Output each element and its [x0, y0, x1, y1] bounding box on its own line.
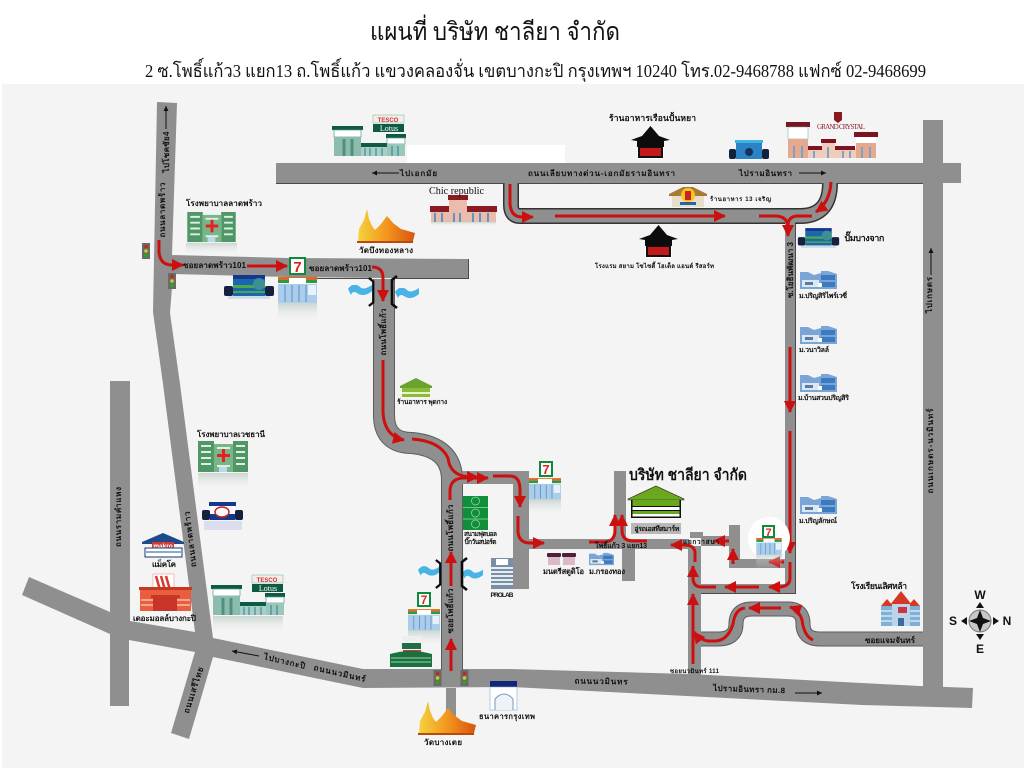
road labels: ถนนโพธิ์แก้ว — [444, 504, 455, 552]
place labels: ม.บ้านสวนปริญสิริ — [798, 393, 849, 402]
icon: 7-Eleven Phothi Kaeo — [529, 461, 561, 516]
garage label: อู่รถเอสทีสมาร์ท — [634, 524, 680, 534]
road labels: ถนนเสรีไทย — [181, 665, 205, 714]
icon: compass — [949, 588, 1011, 656]
icon: house Parinsiri Privacy — [800, 271, 837, 289]
road labels: ถนนรามคำแหง — [114, 487, 123, 547]
garage label — [631, 523, 681, 534]
road labels: ไปรามอินทรา — [738, 168, 792, 178]
icon: hospital Vejthani — [198, 441, 248, 491]
place labels: โรงพยาบาลลาดพร้าว — [185, 198, 262, 208]
road labels: ซอยนวมินทร์ 111 — [670, 667, 720, 675]
icon: 13 Charoen restaurant — [669, 187, 707, 207]
road labels: ถนนนวมินทร — [574, 677, 628, 686]
road network — [22, 102, 973, 739]
icon: compass: N — [1003, 614, 1011, 628]
place labels: Chic republic — [429, 185, 484, 197]
road labels: ซอยลาดพร้าว101 — [309, 263, 373, 273]
place labels: เดอะมอลล์บางกะปิ — [133, 613, 196, 623]
icon: school — [881, 591, 920, 626]
road labels: ซ.โยธินพัฒนา 3 — [785, 241, 795, 298]
icon: Tesco Lotus north: Lotus — [380, 124, 398, 133]
route arrows — [159, 182, 831, 671]
icon: green restaurant — [400, 378, 432, 397]
place labels: วัดบึงทองหลาง — [359, 246, 413, 255]
road labels: ถนนเลียบทางด่วน-เอกมัยรามอินทรา — [528, 168, 675, 178]
icon: 7-Eleven Lat Phrao: 7 — [293, 259, 302, 276]
road labels: ซอยแจมจันทร์ — [865, 635, 916, 645]
road labels: ไปโชคชัย4 — [161, 131, 171, 174]
icon: Bangchak station west — [224, 275, 274, 299]
place labels: โรงเรียนเลิศหล้า — [850, 581, 907, 591]
road labels: ถนนลาดพร้าว — [157, 182, 167, 238]
icon: Siam Society hotel — [639, 225, 678, 258]
place labels: ร้านอาหาร พุดกาง — [397, 397, 447, 406]
icon: 7-Eleven south — [408, 592, 440, 647]
icon: 7-Eleven south: 7 — [421, 593, 428, 607]
place labels: โรงแรม สยาม โซไซตี้ โฮเต็ล แอนด์ รีสอร์ท — [594, 260, 714, 270]
road labels: ซอยโพธิ์แก้ว — [444, 588, 455, 634]
icon: company building — [628, 486, 684, 518]
place labels: ม.วนาวิลล์ — [799, 345, 829, 354]
icon: temple Bang Toei — [418, 701, 476, 735]
road labels: ไปรามอินทรา กม.8 — [712, 683, 786, 695]
place labels: ม.ปริญลักษณ์ — [799, 516, 838, 525]
traffic lights — [142, 243, 468, 686]
icon: Chic republic — [430, 195, 497, 226]
icon: Prolab building — [490, 558, 514, 599]
icon: Tesco Lotus north — [332, 115, 406, 156]
place labels: โรงพยาบาลเวชธานี — [196, 429, 266, 439]
bridge: south canal — [418, 558, 483, 590]
place labels: มนตรีสตูดิโอ — [543, 566, 584, 577]
icon: hospital Lat Phrao — [186, 212, 237, 255]
icon: house Krong Thong — [589, 553, 614, 565]
icon: Grand Crystal: GRAND CRYSTAL — [817, 123, 865, 131]
place labels: ร้านอาหาร 13 เจริญ — [710, 195, 771, 203]
address line: 2 ซ.โพธิ์แก้ว3 แยก13 ถ.โพธิ์แก้ว แขวงคลองจั่น เขตบางกะปิ กรุงเทพฯ 10240 โทร.02-9468788 แฟกซ์ 02-9468699 — [145, 57, 926, 82]
icon: blue petrol station — [729, 140, 769, 159]
icon: house Parinlak — [800, 496, 837, 514]
place labels: บิ๊กวันสปอร์ต — [464, 537, 496, 546]
road labels: ซอยลาดพร้าว101 — [183, 260, 247, 270]
icon: Tesco Lotus south: Lotus — [259, 584, 277, 593]
icon: Montri studio — [547, 553, 576, 565]
road labels: ไปบางกะปิ — [262, 651, 306, 671]
icon: The Mall — [139, 574, 192, 611]
white patch beside top road — [407, 145, 565, 163]
icon: compass: S — [949, 614, 957, 628]
road direction arrows — [166, 106, 931, 693]
place labels: แม็คโค — [152, 558, 176, 569]
road labels: ถนนโพธิ์แก้ว — [377, 308, 388, 356]
road labels: ถนนนวมินทร์ — [313, 662, 367, 684]
icon: Tesco Lotus south — [211, 575, 285, 634]
icon: 7-Eleven Phothi Kaeo: 7 — [542, 462, 550, 477]
icon: Tesco Lotus south: TESCO — [257, 578, 278, 584]
icon: temple Bueng Thong Lang — [357, 209, 415, 243]
road labels: ไปเอกมัย — [399, 168, 437, 178]
road labels: ถนนเกษตร-นวมินทร์ — [925, 408, 935, 494]
icon: Esso station — [202, 502, 243, 530]
icon: compass: E — [976, 642, 984, 656]
place labels: วัดบางเตย — [424, 738, 462, 747]
place labels: ปั๊มบางจาก — [844, 231, 884, 243]
icon: Makro: makro — [153, 543, 173, 550]
place labels: ธนาคารกรุงเทพ — [479, 712, 535, 721]
icon: Bangchak station east — [798, 228, 839, 248]
icon: house Baan Suan Parinsiri — [800, 374, 837, 392]
road labels: ถนนลาดพร้าว — [182, 510, 198, 568]
icon: house Wanawill — [800, 326, 837, 344]
icon: Prolab building: PROLAB — [490, 592, 514, 599]
icon: 7-Eleven soi — [748, 517, 790, 568]
company name: บริษัท ชาลียา จำกัด — [629, 466, 747, 484]
title: แผนที่ บริษัท ชาลียา จำกัด — [370, 14, 620, 46]
icon: Grand Crystal — [786, 112, 878, 158]
place labels: ม.ปริญสิริไพร์เวซี่ — [799, 290, 847, 300]
road labels: แยกวาสนา — [683, 539, 719, 546]
road labels: ไปเกษตร — [924, 276, 934, 314]
road labels — [114, 131, 935, 714]
place labels: ม.กรองทอง — [589, 567, 625, 576]
icon: compass: W — [974, 588, 986, 602]
icon: Tesco Lotus north: TESCO — [378, 118, 399, 124]
place labels: ร้านอาหารเรือนปั้นหยา — [609, 111, 696, 123]
icon: 7-Eleven Lat Phrao — [278, 257, 317, 323]
icon: football field — [463, 496, 488, 530]
place labels: สนามฟุตบอล — [464, 530, 497, 538]
road labels: โพธิ์แก้ว 3 แยก13 — [594, 540, 647, 550]
icon: Makro — [142, 533, 184, 557]
bridge: north canal — [348, 276, 419, 308]
icon: Bangkok Bank — [490, 681, 517, 710]
icon: Ruen Panya restaurant — [631, 126, 670, 159]
icon: green store — [390, 636, 432, 667]
place labels — [133, 111, 907, 747]
icon: 7-Eleven soi: 7 — [765, 527, 772, 539]
